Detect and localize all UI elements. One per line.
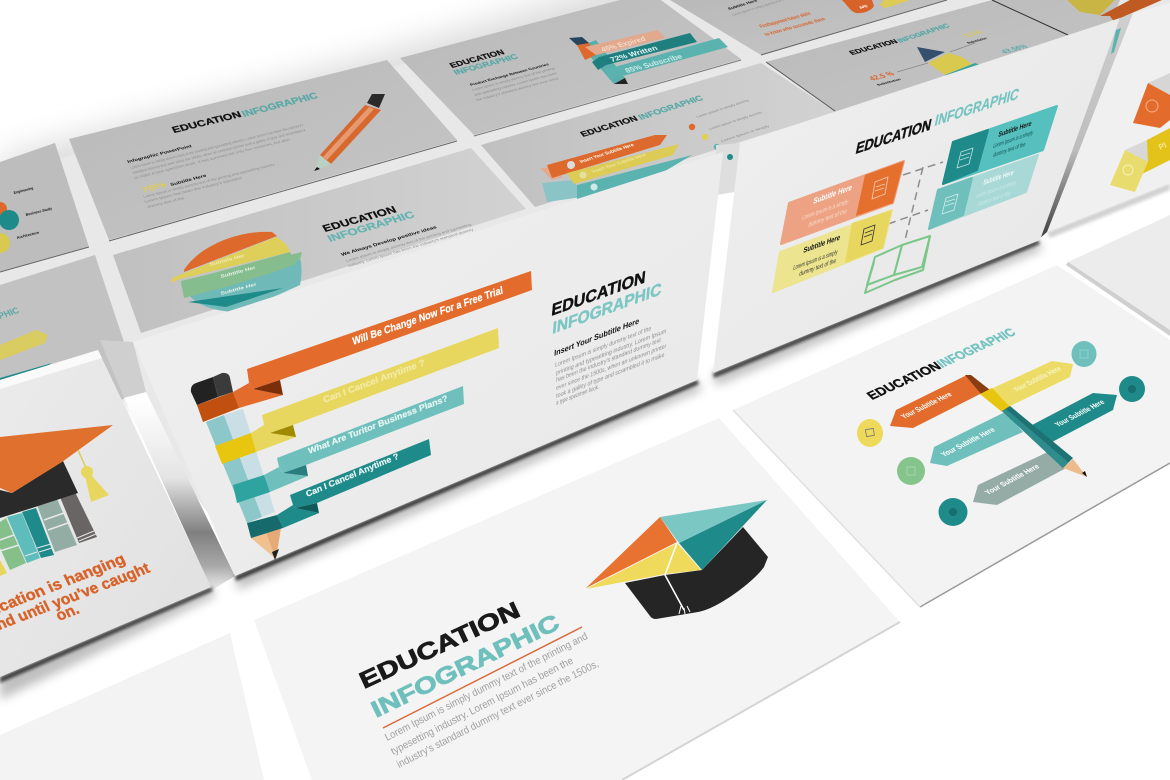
panel: pencil slide (back row): INFOGRAPHIC <box>240 91 320 119</box>
chart: pencil bars <box>569 30 728 84</box>
arrow: dark teal <box>1032 393 1117 442</box>
box: salmon orange: Lorem Ipsum is a simply <box>802 198 849 222</box>
ribbon: light teal <box>233 386 464 503</box>
panel: slide with circles (back left): Architecture <box>16 231 40 240</box>
body text: industry's standard dummy text ever since the 1500s, <box>395 658 601 771</box>
gap strip with dots <box>697 143 741 380</box>
body text: Lorem Ipsum is simply dummy text of the <box>555 325 652 369</box>
panel: bars slide (back top): the industry's standard dummy text ever since <box>475 76 560 102</box>
ribbon: orange: Will Be Change Now For a Free Trial <box>352 284 504 348</box>
panel: slide with circles (back left): Engineering <box>13 186 34 195</box>
chart: layered circle: Subtitle Her <box>209 253 245 267</box>
box: yellow <box>773 210 892 292</box>
chart: stacked arrows: Insert Your Subtitle Here <box>578 142 635 164</box>
arrow labels: Your Subtitle Here <box>939 425 998 458</box>
panel: bars slide (back top): Product Exchange Between Countries <box>469 63 550 87</box>
heading: EDUCATION <box>448 48 507 70</box>
panel: burger slide (back middle): We Always Develop positive ideas <box>340 224 438 257</box>
arrow: grey <box>973 450 1068 505</box>
chart fragment <box>842 0 874 13</box>
panel: crossed arrows slide (floor right): INFOGRAPHIC <box>933 325 1019 370</box>
bullet dots: Lorem Ipsum is simply dummy <box>708 110 763 131</box>
panel: pencil slide (back row): Subtitle Here <box>169 173 208 187</box>
chart: pyramid <box>897 43 990 80</box>
panel: orange text slide (back top right) <box>670 0 947 55</box>
panel: cap with books slide (front left) <box>0 350 216 700</box>
heading: EDUCATION <box>321 205 399 235</box>
chart: layered circle <box>171 232 302 312</box>
panel: burger slide (back middle) <box>113 148 526 333</box>
box: pale teal: Subtitle Here <box>983 169 1014 187</box>
icon: graduation cap <box>586 500 768 619</box>
box: teal <box>943 106 1057 184</box>
panel: bars slide (back top): Lorem Ipsum is simply dummy text of the printing <box>471 66 556 92</box>
fragment: books top right <box>1067 0 1115 15</box>
bullet dots <box>689 98 771 150</box>
panel: burger slide (back middle): Lorem Ipsum is simply dummy text of the printing and typesetting <box>345 223 472 263</box>
arrow labels: Your Subtitle Here <box>1053 398 1107 428</box>
orange rule <box>383 627 582 728</box>
arrow: yellow <box>982 361 1073 407</box>
panel: cap title slide (floor center): INFOGRAPHIC <box>367 609 563 722</box>
box: pale teal <box>929 155 1038 229</box>
chart: pencil bars: 45% Expired <box>599 34 648 54</box>
heading: EDUCATION <box>355 596 524 694</box>
ribbon: dark teal <box>247 439 431 538</box>
subtitle: Insert Your Subtitle Here <box>554 316 640 358</box>
box: pale teal: dummy text of the <box>978 191 1011 208</box>
panel: pyramid slide (back right): 43.56% <box>1000 44 1030 56</box>
heading: EDUCATION <box>854 116 933 158</box>
heading: EDUCATION <box>863 359 944 402</box>
box: teal: Lorem Ipsum is a simply <box>993 130 1034 150</box>
panel: pencil slide (back row): 78% <box>140 180 168 195</box>
panel: pencil slide (back row): Lorem Ipsum has been the industry's standard <box>144 176 242 204</box>
pencil tip <box>251 528 281 560</box>
icon: yellow book: Pl <box>1157 141 1168 152</box>
ribbon: dark teal: Can I Cancel Anytime ? <box>305 451 400 499</box>
panel: pyramid slide (back right): INFOGRAPHIC <box>896 23 952 44</box>
panel: pencil slide (back row): standard dummy text ever since the 1500s, when an unknown printer took a galley of type and scrambled it <box>132 128 306 175</box>
chart: layered circle: Subtitle Her <box>220 265 256 279</box>
box: yellow: dummy text of the <box>799 257 837 278</box>
body text: took a galley of type and scrambled it to make <box>556 351 665 400</box>
panel: bottom left blank slide <box>0 633 264 780</box>
panel: bars slide (back top): INFOGRAPHIC <box>452 52 520 77</box>
heading: EDUCATION <box>551 268 647 320</box>
panel: pencil ribbons slide (front center) <box>133 152 723 590</box>
arrow: orange <box>890 375 988 428</box>
panel: orange text slide (back top right): Firsthappened future skills <box>758 11 813 30</box>
box: salmon orange: Subtitle Here <box>813 182 853 206</box>
reflection edge between box slide and book slide <box>1038 13 1133 240</box>
panel: bars slide (back top): and typesetting industry. Lorem Ipsum has been <box>473 71 558 97</box>
heading: EDUCATION <box>579 114 640 139</box>
panel: cap title slide (floor center) <box>254 418 900 780</box>
chart: stacked arrows: Insert Your Subtitle Here <box>590 152 647 174</box>
panel: slide with circles (back left): Business Study <box>25 207 52 217</box>
icon circles <box>857 341 1145 526</box>
ribbon: yellow <box>215 328 499 464</box>
chart: pencil ribbon diagram <box>191 271 532 560</box>
box: teal: dummy text of the <box>993 142 1026 159</box>
body text <box>555 325 667 407</box>
icon: pencil <box>314 94 385 171</box>
panel: crossed arrows slide (floor right) <box>733 265 1170 607</box>
icon: books <box>0 492 97 576</box>
panel: pencil slide (back row): Lorem Ipsum is simply dummy text of the printing and typesetting industry <box>143 163 276 199</box>
body text: printing and typesetting industry. Lorem Ipsum <box>556 327 667 377</box>
panel: pyramid slide (back right): Substitution <box>966 37 988 45</box>
arrow labels <box>899 364 1107 496</box>
chart: pencil bars: 72% Written <box>608 44 660 64</box>
bullet dots: Lorem Ipsum is simply dummy <box>695 98 750 119</box>
panel: pencil slide (back row): Infographic PowerPoint <box>126 143 193 164</box>
dashed connectors <box>888 162 943 240</box>
panel: pencil slide (back row): dummy text of the <box>147 196 185 209</box>
chart: stacked arrows <box>540 135 692 205</box>
panel: pyramid slide (back right): Substitution <box>876 78 902 87</box>
box: yellow: Lorem Ipsum is a simply <box>793 248 839 272</box>
quote text: on. <box>53 601 82 625</box>
ribbon: yellow: Can I Cancel Anytime ? <box>322 357 426 405</box>
panel: pencil slide (back row) <box>69 60 457 241</box>
panel: box diagram slide (front right): INFOGRAPHIC <box>933 85 1021 130</box>
heading: EDUCATION <box>170 110 243 135</box>
panel: orange text slide (back top right): 54% <box>859 3 868 10</box>
icon: yellow book <box>1110 128 1170 192</box>
icon: open book <box>865 236 930 293</box>
panel: bars slide (back top) <box>400 0 741 136</box>
heading: EDUCATION <box>848 39 900 57</box>
reflection gap between cap slide and pencil slide <box>100 340 235 590</box>
bullet dots: Lorem Ipsum is simply <box>720 124 771 143</box>
body text: ever since the 1500s, when an unknown printer <box>556 342 667 392</box>
panel: burger slide (back middle): industry. Lorem Ipsum has been the industry's standard dummy <box>347 228 474 268</box>
panel: far right standing slide with books <box>1047 3 1170 238</box>
icon: graduation cap <box>0 425 113 518</box>
arrow labels: Your Subtitle Here <box>983 462 1042 496</box>
icon: pencil <box>965 375 1087 477</box>
body text: has been the industry's standard dummy text <box>556 337 661 384</box>
arrow labels: Your Subtitle Here <box>1011 364 1064 393</box>
ribbon: orange <box>197 271 532 422</box>
panel: arrow list slide (back center) <box>481 63 835 207</box>
box: teal: Subtitle Here <box>998 120 1032 139</box>
box: salmon orange <box>781 161 904 244</box>
panel: pyramid slide (back right): 42.5 % <box>867 69 897 83</box>
box: salmon orange: dummy text of the <box>808 208 848 229</box>
box: yellow: Subtitle Here <box>803 232 841 255</box>
panel: slide with circles (back left) <box>0 143 89 272</box>
icon: orange book <box>1133 73 1170 128</box>
arrow labels: Your Subtitle Here <box>899 390 955 420</box>
eraser <box>191 373 233 405</box>
panel: orange text slide (back top right): Subtitle Here <box>727 0 758 11</box>
panel: slide with arrows and fragment (left middle) <box>0 255 141 440</box>
pencil body columns <box>206 409 275 523</box>
panel: pyramid slide (back right): 71.5 % <box>961 30 984 40</box>
panel: pencil slide (back row): Lorem Ipsum is simply dummy text of the printing and typesetting industry. Lorem Ipsum has been the industry's <box>130 123 304 170</box>
panel: box diagram slide (front right) <box>713 18 1120 386</box>
box: pale teal: Lorem Ipsum is a simply <box>976 180 1017 200</box>
panel: pyramid slide (back right) <box>766 0 1162 112</box>
panel: pencil slide (back row): to make a type specimen book. It has survived not only five centuries, but also <box>134 138 291 180</box>
body text: a type specimen book. <box>556 383 600 407</box>
panel: far right floor slide <box>1066 215 1170 336</box>
body text: Lorem Ipsum is simply dummy text of the printing and <box>383 630 590 744</box>
panel: burger slide (back middle): INFOGRAPHIC <box>326 210 418 245</box>
body text: typesetting industry. Lorem Ipsum has been the <box>389 655 575 758</box>
ribbon: light teal: What Are Turitor Business Plans? <box>307 393 449 456</box>
chart: pencil bars: 85% Subscribe <box>623 52 684 75</box>
arrow: light teal <box>930 412 1023 466</box>
panel: arrow list slide (back center): INFOGRAPHIC <box>636 94 705 122</box>
panel: pencil ribbons slide (front center): INFOGRAPHIC <box>552 280 662 338</box>
panel: orange text slide (back top right): to know who succeeds them <box>763 17 828 38</box>
chart: layered circle: Subtitle Her <box>220 281 257 296</box>
